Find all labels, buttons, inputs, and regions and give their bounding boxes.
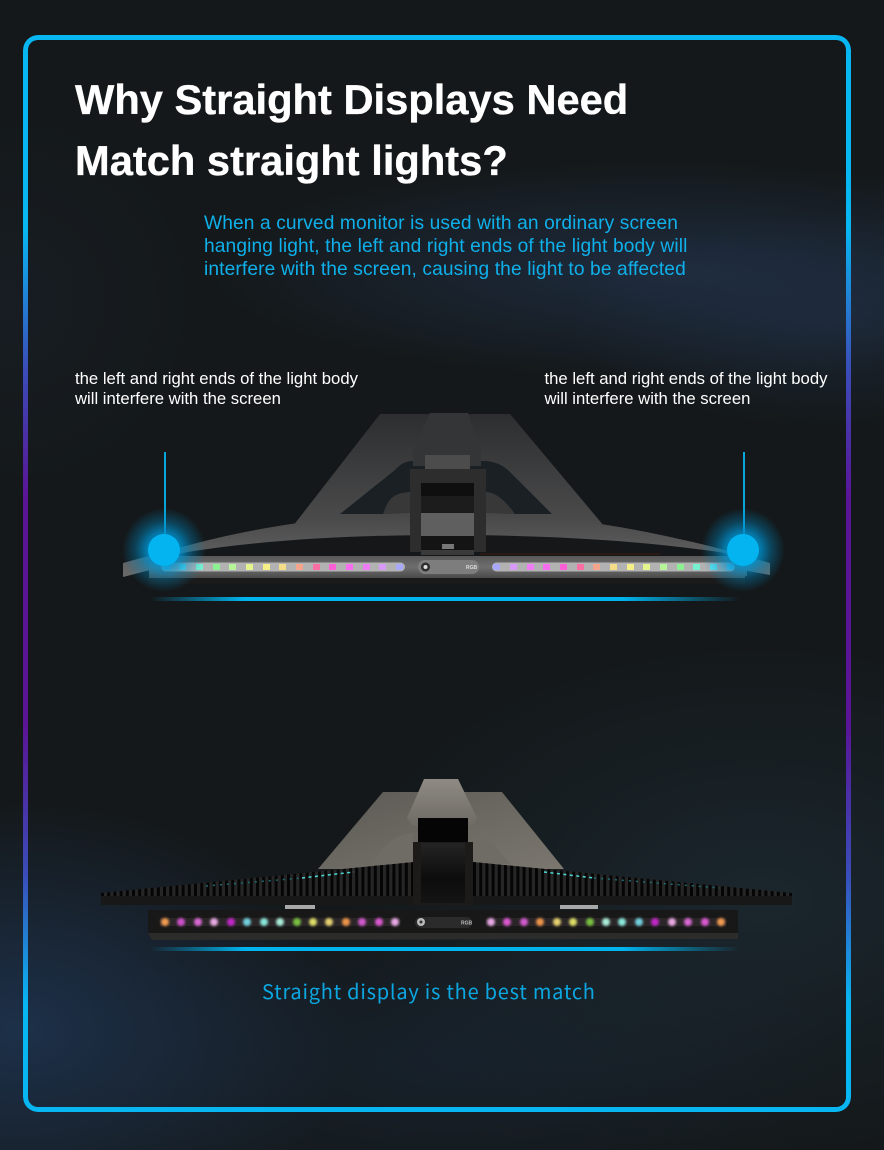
glow line under straight setup bbox=[150, 947, 740, 951]
straight monitor panel with slats bbox=[101, 862, 792, 905]
curved monitor neck bbox=[413, 413, 481, 466]
title bbox=[74, 76, 628, 184]
intro text block: interfere with the screen, causing the light to be affected bbox=[204, 259, 686, 280]
control panel bbox=[418, 560, 479, 574]
curved monitor body bbox=[123, 512, 770, 577]
straight setup light bar bbox=[148, 910, 738, 940]
intro text block bbox=[204, 213, 688, 280]
curved monitor clamp bbox=[410, 469, 486, 555]
title: Why Straight Displays Need bbox=[75, 76, 628, 123]
illustration: monitors and lights bbox=[101, 413, 792, 951]
right callout text bbox=[544, 369, 828, 408]
caption: Straight display is the best match bbox=[262, 976, 596, 1005]
right LED row bbox=[486, 918, 726, 926]
curved monitor bbox=[123, 413, 770, 577]
right callout text: will interfere with the screen bbox=[544, 389, 750, 408]
control panel bbox=[415, 917, 472, 928]
left LED strip bbox=[161, 562, 405, 572]
curved setup light bar bbox=[149, 553, 747, 584]
control panel: RGB bbox=[461, 920, 472, 926]
curved monitor stand bbox=[293, 414, 604, 526]
right callout marker bbox=[701, 452, 785, 592]
left callout text: will interfere with the screen bbox=[75, 389, 281, 408]
intro text block: hanging light, the left and right ends of the light body will bbox=[204, 236, 688, 257]
left LED row bbox=[160, 918, 400, 926]
straight monitor stand bbox=[318, 792, 564, 869]
left callout marker bbox=[122, 452, 206, 592]
control panel: RGB bbox=[466, 565, 478, 571]
glow line under curved setup bbox=[150, 597, 740, 601]
right LED strip bbox=[492, 562, 735, 572]
dark shoulder recess bbox=[340, 461, 552, 514]
right callout text: the left and right ends of the light body bbox=[544, 369, 827, 388]
intro text block: When a curved monitor is used with an ordinary screen bbox=[204, 213, 678, 234]
straight monitor bbox=[101, 779, 792, 909]
straight monitor clamp bbox=[413, 818, 473, 905]
left callout text: the left and right ends of the light body bbox=[75, 369, 358, 388]
straight monitor neck bbox=[407, 779, 477, 826]
title: Match straight lights? bbox=[75, 137, 508, 184]
left callout text bbox=[75, 369, 358, 408]
